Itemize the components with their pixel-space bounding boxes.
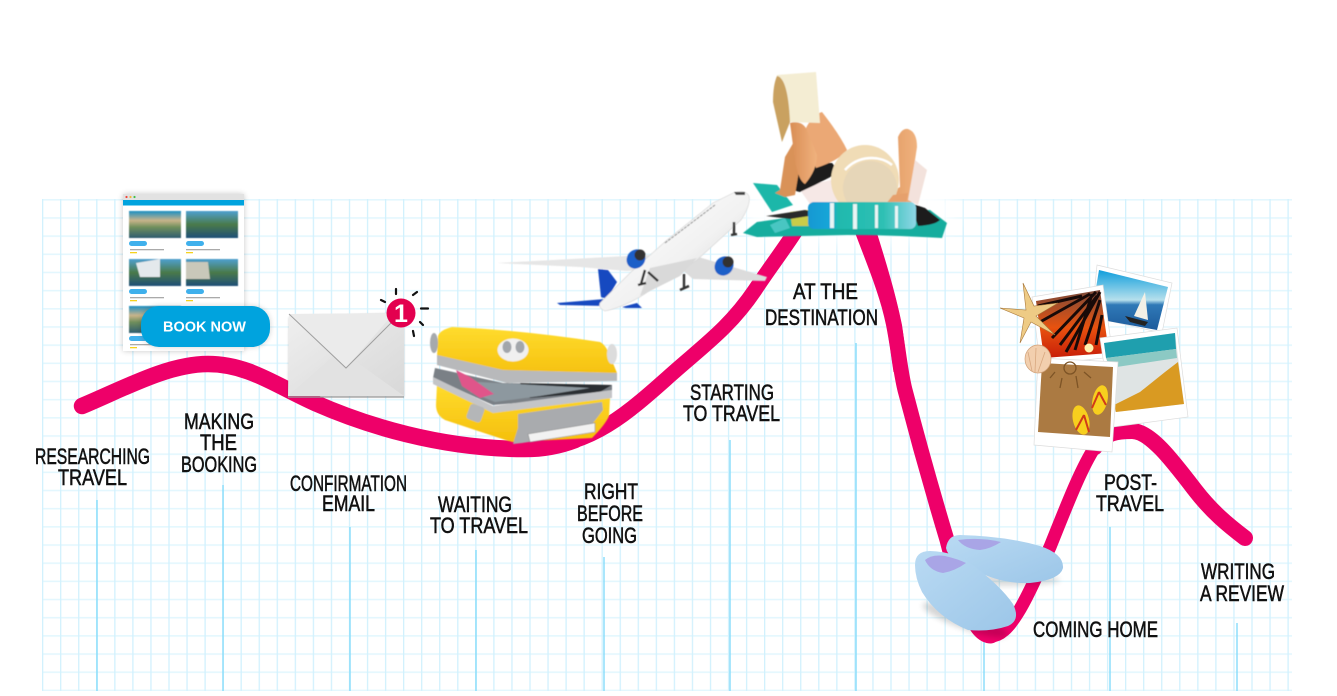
label: waiting to travel — [430, 492, 528, 538]
label: making the booking: THE — [200, 430, 237, 455]
label: starting to travel: TO TRAVEL — [683, 401, 780, 426]
label: post-travel: TRAVEL — [1096, 491, 1164, 516]
label: writing a review: A REVIEW — [1200, 581, 1284, 606]
photo: beach shoreline — [1100, 328, 1188, 427]
icon: hotel browser window — [123, 194, 244, 351]
icon: notification badge — [381, 289, 428, 336]
journey curve — [82, 230, 1245, 636]
label: writing a review: WRITING — [1201, 559, 1275, 584]
icon: airplane — [497, 192, 767, 311]
icon: open yellow suitcase — [430, 327, 617, 444]
label: confirmation email — [290, 471, 407, 516]
label: making the booking — [181, 409, 257, 477]
label: researching travel: TRAVEL — [58, 465, 127, 490]
label: coming home: COMING HOME — [1033, 617, 1158, 642]
label: post-travel: POST- — [1104, 470, 1157, 495]
label: waiting to travel: WAITING — [438, 492, 512, 517]
photo: palm sunset — [1032, 285, 1113, 365]
photo: sailboat — [1091, 265, 1172, 333]
label: confirmation email: CONFIRMATION — [290, 471, 407, 496]
icon: holiday photos — [1000, 265, 1188, 452]
label: right before going: GOING — [582, 523, 637, 548]
timeline tick lines — [97, 343, 1237, 691]
label: researching travel: RESEARCHING — [35, 444, 150, 469]
icon: blue slippers — [915, 535, 1063, 644]
icon: seashell — [1025, 345, 1051, 373]
button: book now: BOOK NOW — [163, 320, 246, 336]
icon: woman reading on beach mat — [743, 72, 947, 238]
label: at the destination: DESTINATION — [765, 305, 878, 330]
label: right before going: RIGHT — [584, 479, 638, 504]
labels — [35, 279, 1284, 642]
grid background — [42, 199, 1292, 691]
icon: notification badge: 1 — [394, 300, 408, 328]
label: at the destination: AT THE — [793, 279, 858, 304]
label: making the booking: MAKING — [184, 409, 254, 434]
icon: starfish — [1000, 283, 1058, 343]
label: researching travel — [35, 444, 150, 490]
icon: envelope — [288, 313, 404, 397]
label: writing a review — [1200, 559, 1284, 606]
label: starting to travel: STARTING — [690, 380, 774, 405]
label: making the booking: BOOKING — [181, 452, 257, 477]
label: waiting to travel: TO TRAVEL — [430, 513, 528, 538]
label: at the destination — [765, 279, 878, 330]
label: starting to travel — [683, 380, 780, 426]
label: post-travel — [1096, 470, 1164, 516]
label: right before going — [577, 479, 643, 548]
photo: flip-flops in sand — [1034, 358, 1118, 452]
label: right before going: BEFORE — [577, 501, 643, 526]
white glow behind traveller — [740, 176, 960, 244]
label: confirmation email: EMAIL — [322, 491, 375, 516]
button: book now — [141, 306, 270, 347]
